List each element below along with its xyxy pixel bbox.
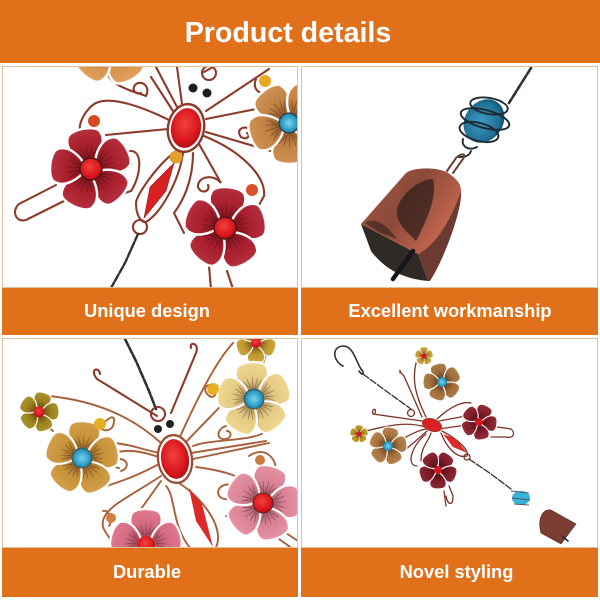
butterfly body gem <box>421 416 443 434</box>
panel: unique design <box>2 66 298 335</box>
bell loop <box>447 154 464 173</box>
photo: gold and pink butterfly <box>2 338 298 548</box>
flower: pale yellow with blue gem <box>211 359 297 442</box>
pendant crystal <box>189 488 213 547</box>
chain <box>125 339 156 409</box>
lower chain <box>469 459 511 489</box>
beads and antennae <box>94 383 265 523</box>
label: durable <box>2 548 298 597</box>
beads <box>88 75 271 196</box>
flower: gold with blue gem <box>39 418 125 501</box>
flower: red left <box>39 120 144 221</box>
photo: bell and blue glass ball <box>301 66 598 288</box>
flower: small top <box>226 314 285 373</box>
flower: bronze left <box>364 424 412 469</box>
pendant crystal <box>443 434 467 453</box>
blue spiral bead <box>511 491 530 505</box>
label: excellent workmanship <box>301 288 598 335</box>
cow bell <box>361 168 461 281</box>
butterfly wires <box>366 363 513 506</box>
butterfly wires <box>43 343 298 549</box>
butterfly body gem <box>164 101 208 155</box>
flower: pink right <box>213 456 313 553</box>
hook <box>335 346 363 374</box>
flower: small left <box>349 425 369 444</box>
header banner: Product details <box>185 17 391 49</box>
header banner <box>0 0 600 63</box>
flower: red lower <box>177 183 273 275</box>
label: unique design: Unique design <box>84 300 210 321</box>
flower: small olive <box>13 387 65 438</box>
label: novel styling <box>301 548 598 597</box>
flower: bronze top <box>417 358 467 407</box>
flower: pink bottom <box>107 509 185 583</box>
panel: excellent workmanship <box>301 66 598 335</box>
photo: red butterfly close-up <box>2 66 298 288</box>
label: unique design <box>2 288 298 335</box>
chain <box>111 234 138 288</box>
blue glass ball in spiral <box>455 91 513 157</box>
flower: top orange, cut off <box>62 0 160 91</box>
butterfly body gem <box>155 433 195 485</box>
label: novel styling: Novel styling <box>400 561 513 582</box>
flower: dark red bottom <box>409 443 466 498</box>
chain <box>509 68 531 103</box>
butterfly wires <box>15 66 271 289</box>
label: durable: Durable <box>113 561 181 582</box>
flower: small top <box>414 347 434 366</box>
label: excellent workmanship: Excellent workmanship <box>348 300 552 321</box>
pendant crystal <box>144 163 174 218</box>
upper chain <box>363 374 411 409</box>
photo: full wind chime <box>301 338 598 548</box>
panel: novel styling <box>301 338 598 597</box>
flower: dark red right <box>453 397 504 448</box>
small bell <box>540 510 576 544</box>
flower: orange right <box>229 63 351 185</box>
panel: durable <box>2 338 298 597</box>
